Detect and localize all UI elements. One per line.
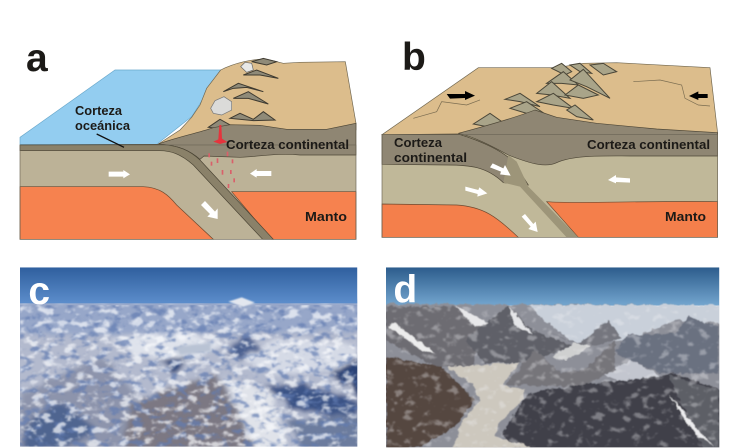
panel b: continental collision [382,36,718,237]
magma drops [208,152,235,188]
continental crust lower b [382,134,528,185]
tributary glacier d [552,343,592,360]
ridge texture snow c [20,305,357,447]
label corteza continental b right: Corteza continental [587,137,710,152]
mountain range d [375,304,728,448]
plate arrows a [109,169,271,219]
photo d: Karakoram glacier [375,267,728,448]
label manto b: Manto [665,209,706,224]
land surface [158,59,356,144]
mantle right a [232,192,356,239]
label corteza continental b left: Corteza [394,135,443,150]
mantle left b [382,204,518,237]
magma [213,125,227,144]
mantle right b [547,201,718,237]
mountains b [473,63,617,127]
letter c: c [28,270,50,313]
leader line [97,134,124,147]
diagram b [382,63,718,237]
eruption cloud [211,97,232,115]
plate arrows b black [447,91,708,100]
land surface b [382,63,718,135]
oceanic crust a [20,144,273,239]
continental crust a [158,123,356,159]
panel a: subduction of oceanic crust [20,37,356,239]
glacier d [447,363,535,448]
cracks b [413,80,710,118]
cloud top [241,62,253,72]
lithosphere a [20,145,356,239]
plate arrows b white [465,163,630,232]
label corteza continental a: Corteza continental [226,137,349,152]
sky c [20,267,357,303]
distant peak c [228,297,255,307]
rock texture d [386,307,719,447]
photo c: Andes aerial [10,267,370,448]
subducting crust b [503,155,578,237]
continental crust upper b [458,110,718,165]
mountain range c [10,300,370,448]
diagram a [20,58,356,239]
label corteza oceanica: oceánica [75,118,131,133]
sky d [386,267,719,306]
label a: a [26,37,48,80]
label corteza continental b left: continental [394,150,467,165]
low cloud c [175,343,212,355]
mountains a [208,58,278,129]
ridge texture dark c [20,305,357,447]
sea surface [20,70,221,144]
label manto a: Manto [305,209,347,224]
label corteza oceanica: Corteza [75,103,123,118]
label b: b [402,36,426,79]
letter d: d [393,269,417,312]
lithosphere b [382,135,718,237]
mantle left a [20,187,213,239]
